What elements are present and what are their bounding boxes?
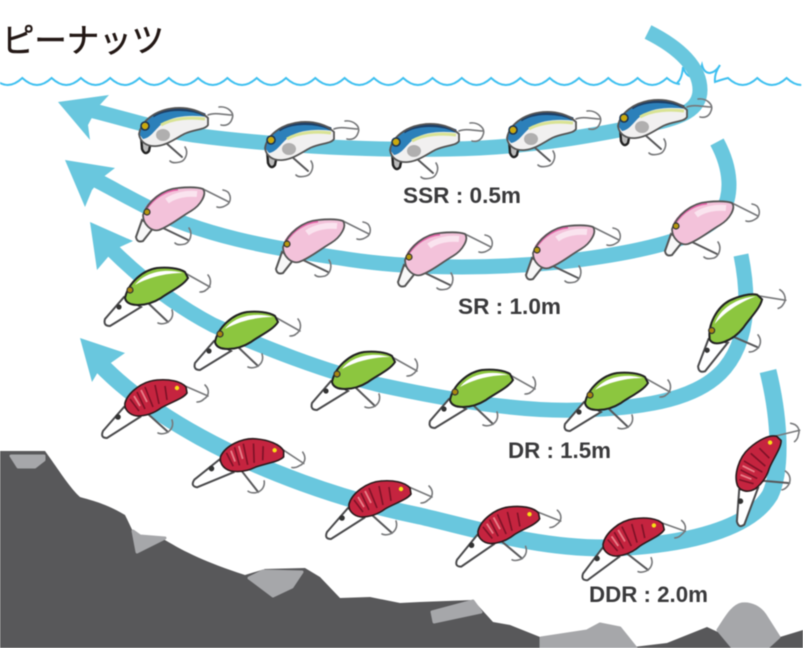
- lure DDR 4: [454, 505, 562, 567]
- lake bed: [0, 451, 803, 648]
- lure DDR 2: [192, 429, 307, 505]
- lure SSR 4: [507, 111, 601, 167]
- rock 2: [133, 531, 165, 552]
- label: DR depth: DR : 1.5m: [508, 438, 611, 463]
- lure SSR 1: [139, 107, 233, 163]
- lures: SR row: [136, 187, 759, 290]
- title: ピーナッツ: [2, 22, 164, 59]
- lure SR 4: [526, 225, 620, 283]
- lures: DR row: [105, 268, 800, 431]
- lure SR 3: [398, 232, 492, 290]
- rock 5: [541, 624, 636, 648]
- lure SR 2: [276, 219, 370, 277]
- lures: SSR row: [139, 99, 712, 179]
- route: SR retrieve path with arrow: [65, 142, 729, 267]
- arrow head: [90, 222, 133, 270]
- lure DDR 1: [102, 380, 208, 438]
- lure SSR 3: [390, 123, 484, 179]
- lures: DDR row: [102, 380, 803, 581]
- lure DDR 6: [705, 417, 803, 528]
- lure DDR 5: [579, 515, 689, 581]
- route: DDR retrieve path with arrow: [80, 338, 778, 548]
- label: SSR depth: SSR : 0.5m: [403, 183, 521, 208]
- lure DR 4: [430, 370, 535, 428]
- rock 4: [432, 601, 481, 622]
- label: SR depth: SR : 1.0m: [458, 294, 561, 319]
- rock 1: [11, 456, 44, 467]
- lure DR 2: [195, 312, 300, 370]
- lure DR 3: [312, 352, 417, 410]
- route: DR retrieve path with arrow: [90, 222, 746, 410]
- arrow head: [58, 95, 109, 140]
- route: SSR retrieve path with arrow: [58, 32, 700, 149]
- rock 6: [718, 604, 779, 648]
- lure DR 5: [565, 373, 670, 431]
- lure DR 6: [680, 282, 800, 373]
- water surface: [0, 65, 801, 85]
- rock 3: [249, 571, 302, 596]
- label: DDR depth: DDR : 2.0m: [589, 582, 708, 607]
- lure SR 5: [665, 201, 759, 259]
- arrow head: [80, 338, 125, 382]
- lure SR 1: [136, 187, 230, 245]
- lure DDR 3: [326, 481, 432, 539]
- lure DR 1: [105, 268, 210, 326]
- lure SSR 5: [618, 99, 712, 155]
- lure SSR 2: [265, 121, 359, 177]
- arrow head: [65, 160, 115, 207]
